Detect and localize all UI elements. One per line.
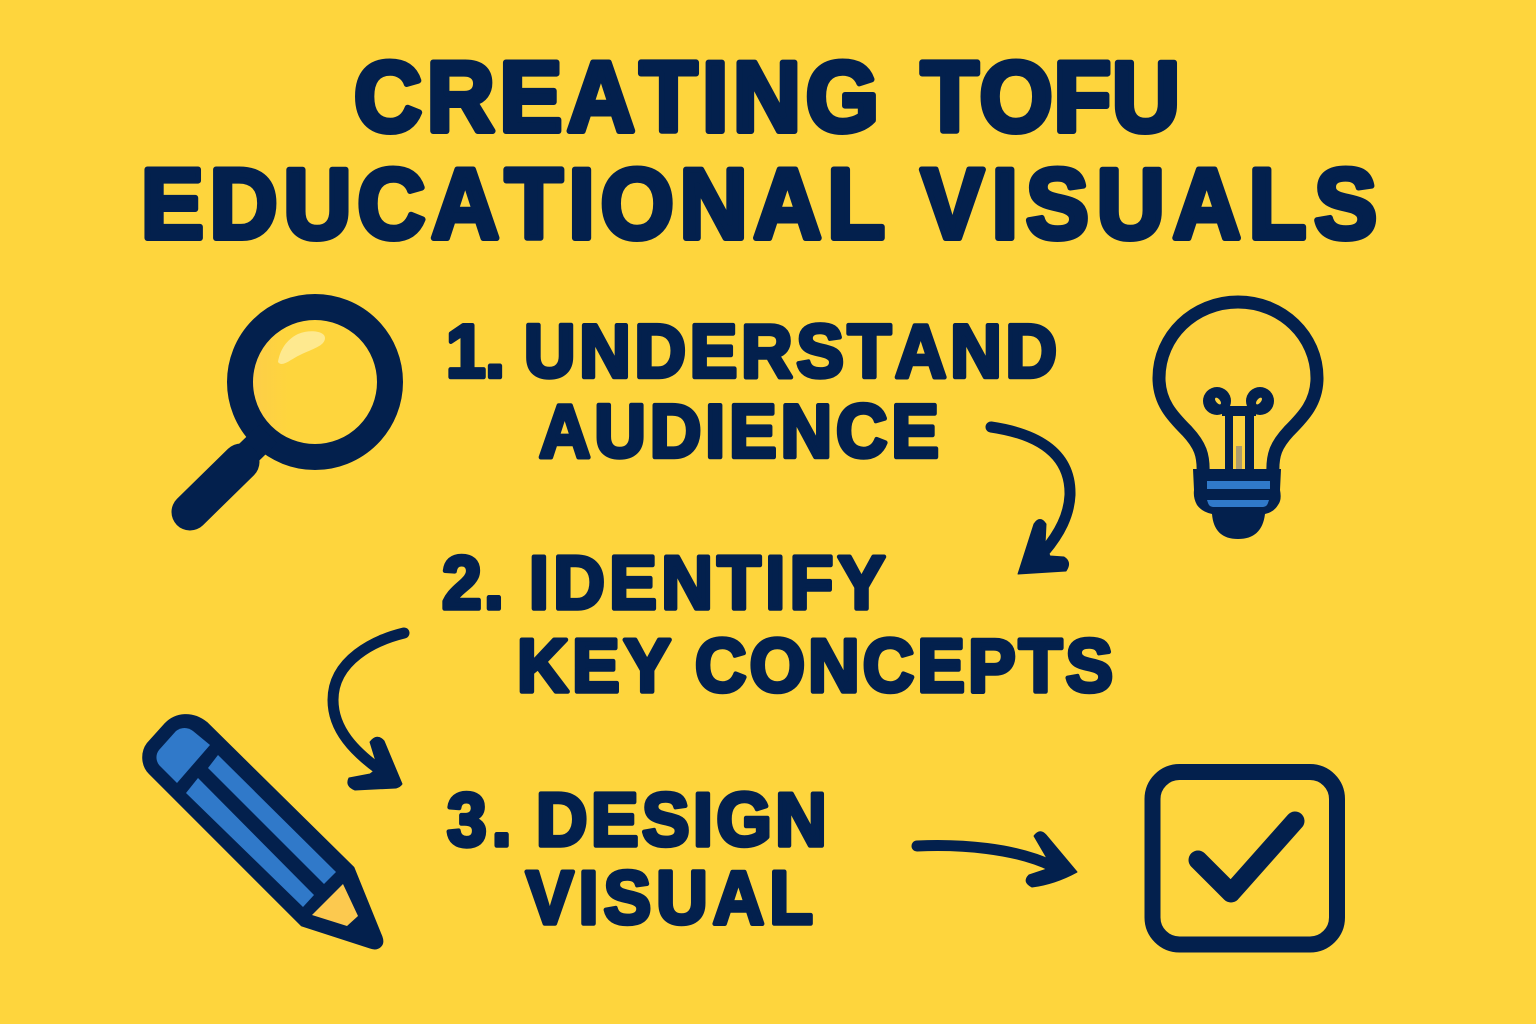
arrow: step 1 to step 2 xyxy=(991,427,1070,574)
step 3 text: VISUAL xyxy=(526,857,813,940)
step 2 text: IDENTIFY xyxy=(529,542,885,625)
step 1 text: UNDERSTAND xyxy=(524,310,1057,393)
step 3 text: DESIGN xyxy=(536,779,827,862)
step 2 text: CONCEPTS xyxy=(695,625,1113,708)
title: VISUALS xyxy=(921,150,1377,260)
step 2 text xyxy=(442,542,1113,708)
icon: magnifying glass xyxy=(190,307,390,512)
title: EDUCATIONAL xyxy=(141,150,885,260)
title xyxy=(141,43,1377,260)
title: CREATING xyxy=(354,43,879,153)
arrow: step 3 to checkbox xyxy=(917,832,1077,887)
step 1 text: 1. xyxy=(446,310,505,393)
step 2 text: 2. xyxy=(442,542,504,625)
icon: checkbox xyxy=(1152,772,1337,944)
step 3 text xyxy=(447,779,827,940)
arrow: step 2 to step 3 xyxy=(333,633,404,790)
icon: pencil xyxy=(144,716,382,948)
step 2 text: KEY xyxy=(517,625,671,708)
title: TOFU xyxy=(921,43,1180,153)
icon: light bulb xyxy=(1159,302,1317,539)
step 1 text xyxy=(446,310,1057,473)
step 3 text: 3. xyxy=(447,779,512,862)
step 1 text: AUDIENCE xyxy=(539,390,939,473)
